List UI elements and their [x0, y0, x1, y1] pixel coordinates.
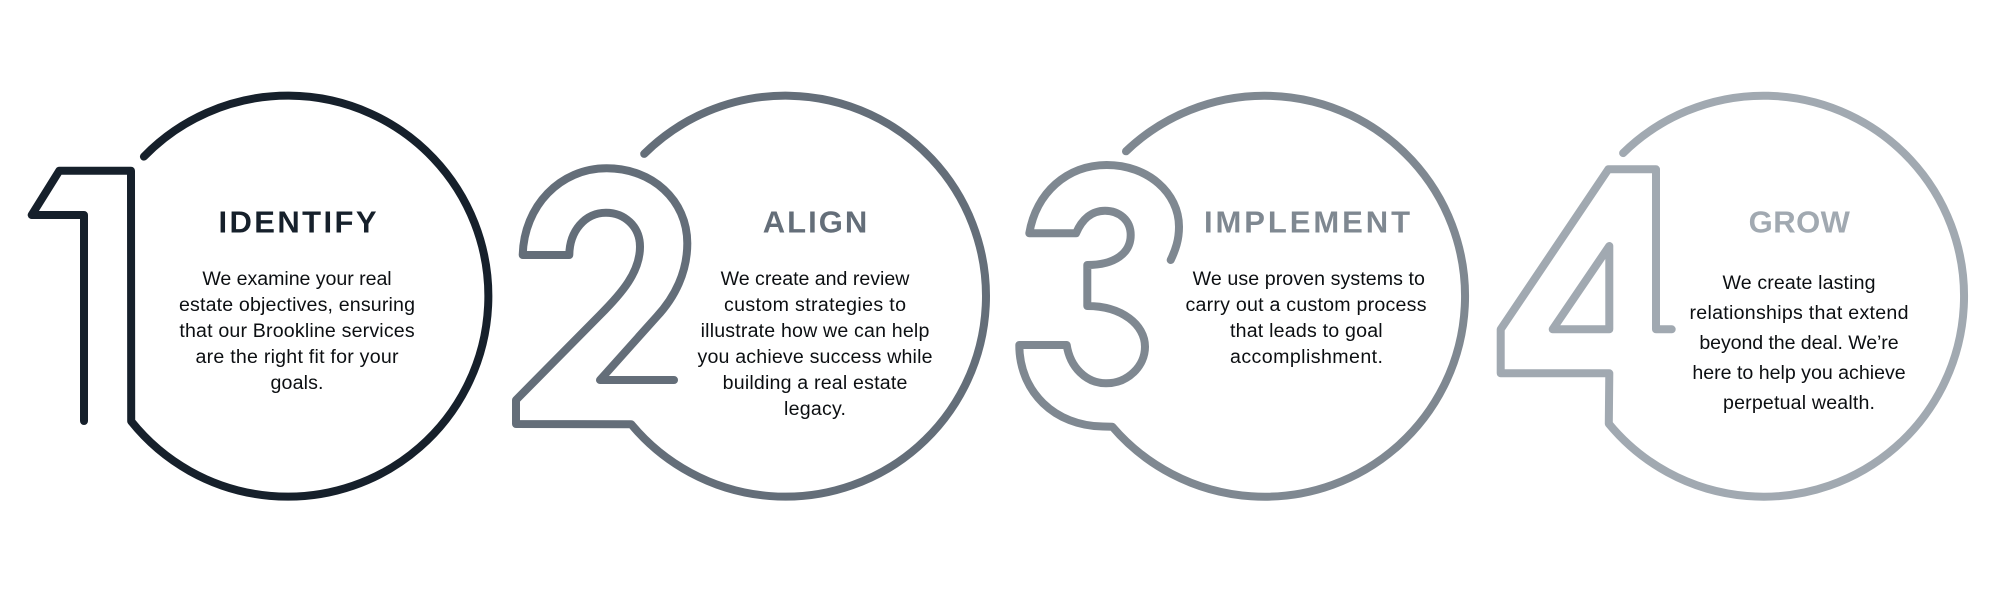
description: align: custom strategies to — [724, 294, 906, 316]
description: grow: here to help you achieve — [1692, 362, 1906, 384]
heading: grow: GROW — [1749, 205, 1851, 240]
description: implement: that leads to goal — [1230, 320, 1383, 342]
description: implement: We use proven systems to — [1193, 268, 1425, 290]
numeral 2 joined to ring — [516, 96, 986, 497]
heading: align: ALIGN — [763, 205, 867, 240]
description: implement — [1186, 268, 1427, 368]
description: align — [698, 268, 933, 420]
description: identify — [179, 268, 415, 394]
description: grow — [1690, 272, 1908, 414]
heading: identify: IDENTIFY — [218, 205, 377, 240]
heading: implement: IMPLEMENT — [1204, 205, 1410, 240]
description: align: We create and review — [721, 268, 910, 290]
panel: step 3 implement — [1019, 96, 1465, 497]
description: grow: perpetual wealth. — [1723, 392, 1875, 414]
description: align: you achieve success while — [698, 346, 933, 368]
description: align: building a real estate — [723, 372, 907, 394]
description: identify: We examine your real — [202, 268, 392, 290]
description: implement: carry out a custom process — [1186, 294, 1427, 316]
description: grow: beyond the deal. We’re — [1699, 332, 1899, 354]
description: grow: relationships that extend — [1690, 302, 1908, 324]
numeral 4 inner triangle — [1553, 246, 1609, 329]
numeral 4 joined to ring — [1501, 96, 1964, 497]
description: implement: accomplishment. — [1230, 346, 1383, 368]
panel: step 4 grow — [1501, 96, 1964, 497]
panel: step 1 identify — [32, 96, 488, 497]
description: identify: are the right fit for your — [196, 346, 399, 368]
description: identify: estate objectives, ensuring — [179, 294, 415, 316]
numeral 1 joined to ring — [32, 96, 488, 497]
description: identify: goals. — [270, 372, 324, 394]
description: identify: that our Brookline services — [179, 320, 415, 342]
description: align: legacy. — [784, 398, 846, 420]
panel: step 2 align — [516, 96, 986, 497]
description: align: illustrate how we can help — [701, 320, 929, 342]
description: grow: We create lasting — [1722, 272, 1876, 294]
numeral 3 joined to ring — [1019, 96, 1465, 497]
